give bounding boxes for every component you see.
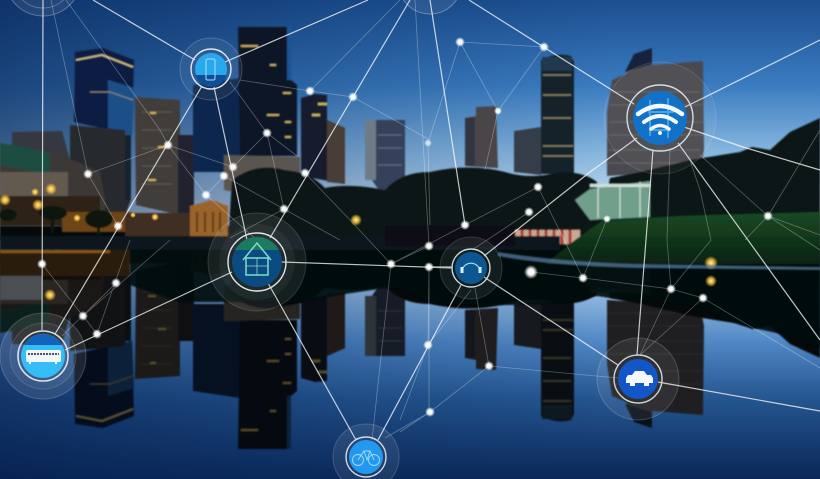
left palm trees <box>0 206 113 235</box>
navy tower <box>193 78 240 172</box>
low tower <box>514 127 541 175</box>
hub: top-left partial <box>5 0 81 16</box>
low dark block <box>125 213 190 238</box>
icon: house <box>243 243 271 275</box>
lawn <box>545 212 820 264</box>
right tree mass <box>600 118 820 226</box>
grey block below tower <box>70 125 131 215</box>
hub: top-centre partial <box>398 0 462 14</box>
cylindrical glass tower <box>541 55 574 174</box>
glass pavilion <box>575 181 650 220</box>
striped barrier <box>510 230 580 244</box>
hub: car <box>597 338 679 420</box>
hub: bicycle <box>333 424 399 479</box>
icon: phone <box>206 59 215 80</box>
left shore reflection <box>0 250 130 300</box>
dark reflection of trees and bank <box>130 245 820 348</box>
twin slim towers <box>465 106 498 168</box>
dark tower with blue facade <box>74 48 134 135</box>
hub: phone <box>180 38 242 100</box>
mid tower pair <box>301 94 345 184</box>
grey high-rise <box>365 120 405 210</box>
street lights <box>0 183 718 301</box>
white facade building <box>224 155 300 195</box>
hub: smart home <box>208 213 306 311</box>
network nodes <box>37 37 773 417</box>
icon: bicycle <box>352 451 380 466</box>
sky darkening left <box>0 0 820 245</box>
icon: car <box>626 371 653 386</box>
large residential building <box>607 48 704 176</box>
icon: headset <box>460 263 482 273</box>
sky background <box>0 0 820 245</box>
narrow dark building <box>178 135 194 215</box>
tree line centre <box>228 168 600 245</box>
orange lit pavilion <box>190 200 228 237</box>
skyline reflection in the water <box>0 212 820 449</box>
icon: wifi <box>638 106 682 134</box>
shoreline <box>0 236 560 250</box>
left podium buildings <box>0 143 132 232</box>
tan office block <box>135 97 180 215</box>
hub: headset <box>440 237 502 299</box>
low buildings far left <box>12 131 70 160</box>
dark bank <box>385 226 515 246</box>
water darkening left <box>0 245 820 479</box>
tall black tower <box>238 27 297 156</box>
pale water channel <box>498 252 820 270</box>
icon: train <box>26 350 61 364</box>
water background <box>0 245 820 479</box>
hub: train <box>0 313 86 399</box>
hub: wifi <box>604 62 716 174</box>
city skyline <box>0 27 820 264</box>
